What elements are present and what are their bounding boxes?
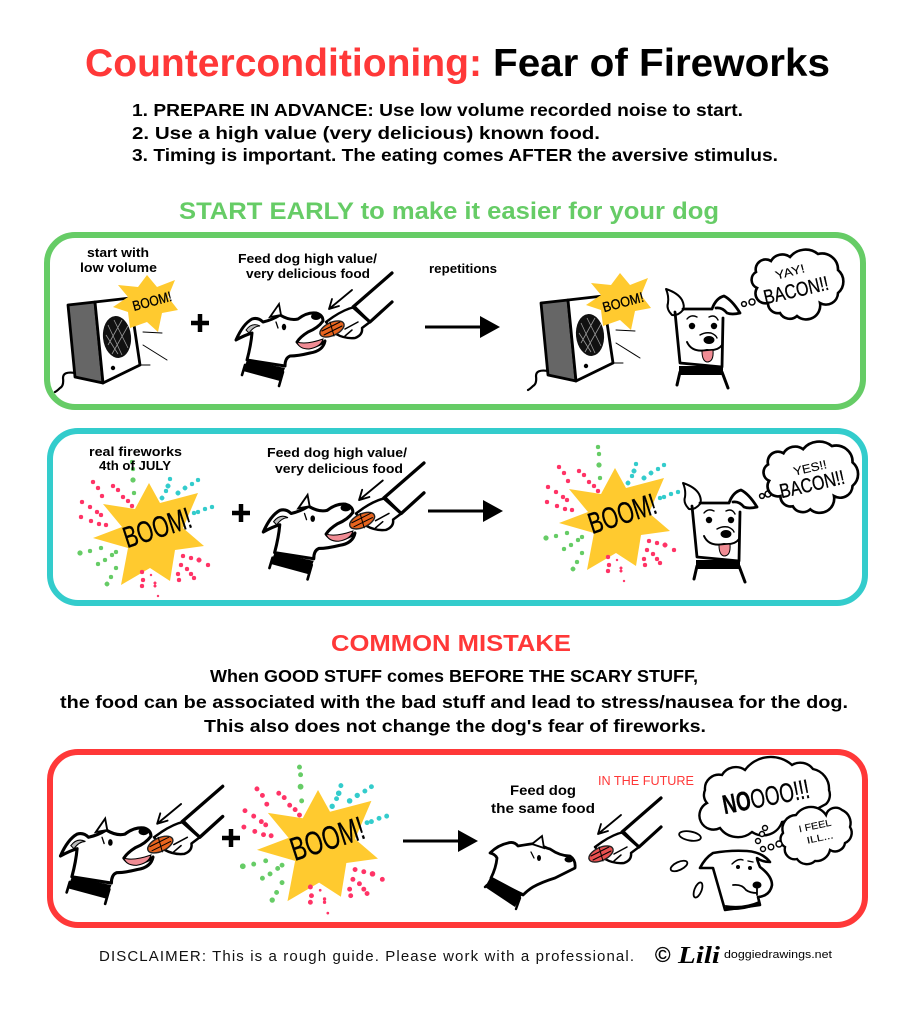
- thought bubble: noooo: NOOOO!!!: [720, 774, 812, 820]
- label: real fireworks: real fireworks: [89, 445, 182, 459]
- icon: happy dog: [666, 289, 740, 388]
- icon: boom burst: [240, 765, 389, 914]
- icon: hand with food: [586, 798, 661, 865]
- thought bubble: yay bacon: BACON!!: [762, 273, 831, 309]
- icon: happy dog: [683, 483, 757, 582]
- label: feed dog the same food: [491, 783, 595, 816]
- thought bubble: yay bacon: [742, 250, 843, 319]
- icon: dog turned from food: [485, 836, 575, 909]
- thought bubble: yay bacon: YAY!: [774, 261, 806, 283]
- thought bubble: noooo: [699, 757, 830, 837]
- icon: sweat drops: [669, 830, 704, 899]
- signature and website: [655, 943, 832, 969]
- title: Counterconditioning:: [85, 42, 482, 85]
- label: feed dog the same food: the same food: [491, 801, 595, 816]
- plus sign: [222, 829, 240, 847]
- thought bubble: yes bacon: BACON!!: [778, 467, 847, 503]
- disclaimer: DISCLAIMER: This is a rough guide. Please work with a professional.: [99, 948, 634, 965]
- thought bubble: i feel ill: ILL...: [806, 830, 834, 847]
- thought bubble: i feel ill: I FEEL: [798, 818, 832, 835]
- label: in the future: IN THE FUTURE: [598, 773, 694, 788]
- label: real fireworks: [89, 445, 182, 473]
- signature and website: doggiedrawings.net: [724, 949, 832, 961]
- icon: boom burst repeat: [544, 445, 680, 582]
- heading: start early: START EARLY to make it easier for your dog: [179, 198, 719, 225]
- arrow: [425, 316, 500, 338]
- numbered instructions: [132, 100, 778, 165]
- plus sign: [232, 504, 250, 522]
- signature and website: ©: [655, 944, 671, 967]
- heading: common mistake: COMMON MISTAKE: [331, 630, 571, 656]
- label: feed dog: very delicious food: [246, 267, 370, 281]
- label: start with low volume: low volume: [80, 261, 157, 275]
- icon: large boom burst: [78, 460, 214, 597]
- label: real fireworks: 4th of JULY: [99, 459, 172, 473]
- icon: speaker with boom: BOOM!: [131, 288, 173, 314]
- mistake explanation: This also does not change the dog's fear of fireworks.: [204, 716, 706, 736]
- label: feed dog: [238, 252, 378, 281]
- thought dots: [756, 826, 782, 852]
- icon: large boom burst: BOOM!: [119, 502, 196, 555]
- label: repetitions: repetitions: [429, 262, 497, 276]
- icon: dog eating from hand: [263, 463, 424, 579]
- numbered instructions: 3. Timing is important. The eating comes AFTER the aversive stimulus.: [132, 145, 778, 165]
- thought bubble: i feel ill: [781, 807, 852, 864]
- label: feed dog the same food: Feed dog: [510, 783, 576, 798]
- mistake explanation: [60, 666, 848, 736]
- plus sign: [191, 314, 209, 332]
- label: start with low volume: start with: [87, 246, 149, 260]
- icon: worried dog: [700, 851, 772, 910]
- panel: common mistake: [50, 752, 865, 925]
- arrow: [403, 830, 478, 852]
- title: Fear of Fireworks: [493, 42, 830, 85]
- thought bubble: yes bacon: YES!!: [792, 457, 828, 479]
- arrow: [428, 500, 503, 522]
- title: [85, 42, 830, 85]
- mistake explanation: the food can be associated with the bad stuff and lead to stress/nausea for the dog.: [60, 692, 848, 712]
- panel: real fireworks: [50, 431, 865, 603]
- numbered instructions: 2. Use a high value (very delicious) known food.: [132, 123, 600, 143]
- label: feed dog: Feed dog high value/: [238, 252, 378, 266]
- numbered instructions: 1. PREPARE IN ADVANCE: Use low volume recorded noise to start.: [132, 100, 743, 120]
- signature and website: Lili: [677, 943, 720, 969]
- icon: speaker with boom, repeat: BOOM!: [601, 289, 645, 315]
- icon: dog eating from hand: [60, 786, 223, 904]
- icon: dog eating from hand: [236, 273, 392, 386]
- icon: speaker with boom: [55, 275, 178, 392]
- label: feed dog: very delicious food: [275, 462, 403, 476]
- mistake explanation: When GOOD STUFF comes BEFORE THE SCARY STUFF,: [210, 666, 698, 686]
- label: start with low volume: [80, 246, 157, 275]
- panel: low volume practice: [47, 235, 863, 407]
- icon: boom burst repeat: BOOM!: [584, 488, 661, 541]
- icon: speaker with boom, repeat: [528, 273, 651, 390]
- icon: boom burst: BOOM!: [285, 809, 369, 868]
- thought bubble: yes bacon: [760, 442, 858, 513]
- label: feed dog: Feed dog high value/: [267, 446, 408, 460]
- label: feed dog: [267, 446, 408, 476]
